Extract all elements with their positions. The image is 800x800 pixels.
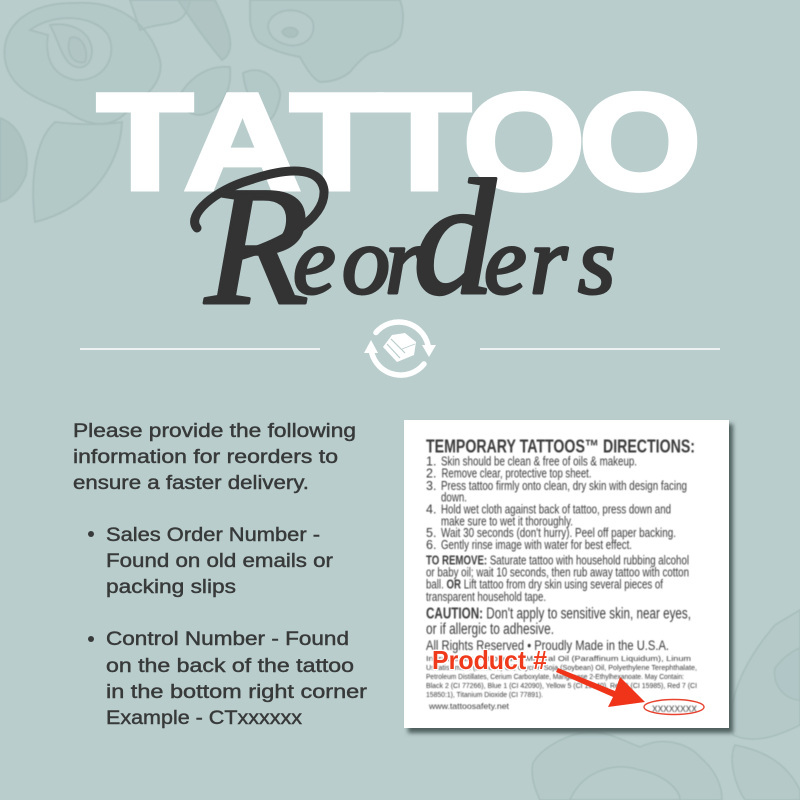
intro text and bullet list: Sales Order Number - xyxy=(106,525,320,546)
intro text and bullet list: in the bottom right corner xyxy=(106,682,368,703)
panel: tattoo directions card: 4. xyxy=(426,503,436,517)
panel: tattoo directions card: TO REMOVE: Saturate tattoo with household rubbing alcohol xyxy=(426,554,689,568)
panel: tattoo directions card: 6. xyxy=(426,538,436,552)
decorative roses bottom right xyxy=(532,610,800,800)
panel: tattoo directions card: Black 2 (CI 77266), Blue 1 (CI 42090), Yellow 5 (CI 19140), Red 6 (CI 15985), Red 7 (CI xyxy=(426,681,697,690)
title: TATTOO xyxy=(97,66,701,219)
script heading: Reorders: e xyxy=(293,207,336,314)
title: TATTOO: T xyxy=(290,66,383,219)
card shadow xyxy=(408,424,733,733)
panel: tattoo directions card: Remove clear, protective top sheet. xyxy=(442,466,592,480)
script heading: Reorders: R xyxy=(204,152,309,340)
panel: tattoo directions card xyxy=(404,420,729,728)
left divider xyxy=(80,348,320,350)
panel: tattoo directions card: XXXXXXXX xyxy=(652,704,697,714)
panel: tattoo directions card: 5. xyxy=(426,526,436,540)
script heading: Reorders: e xyxy=(484,207,527,314)
panel: tattoo directions card: Press tattoo firmly onto clean, dry skin with design facing xyxy=(441,479,687,493)
title: TATTOO: O xyxy=(463,66,585,219)
intro text and bullet list: information for reorders to xyxy=(73,447,338,468)
panel: tattoo directions card: Gently rinse image with water for best effect. xyxy=(441,538,632,552)
title: TATTOO: T xyxy=(378,66,471,219)
panel: tattoo directions card: make sure to wet it thoroughly. xyxy=(441,514,573,528)
panel: tattoo directions card: TEMPORARY TATTOOS™ DIRECTIONS: xyxy=(426,436,695,457)
panel: tattoo directions card: 15850:1), Titanium Dioxide (CI 77891). xyxy=(426,690,543,699)
intro text and bullet list xyxy=(73,421,368,729)
intro text and bullet list: Control Number - Found xyxy=(106,629,349,650)
panel: tattoo directions card: Skin should be clean & free of oils & makeup. xyxy=(441,455,637,469)
intro text and bullet list: on the back of the tattoo xyxy=(106,656,354,677)
panel: tattoo directions card: Ingredients: Petrolatum, Mineral Oil (Paraffinum Liquidum), Linum xyxy=(426,654,691,663)
panel: tattoo directions card: transparent household tape. xyxy=(426,590,546,604)
panel: tattoo directions card: Wait 30 seconds (don't hurry). Peel off paper backing. xyxy=(441,526,676,540)
script heading: Reorders xyxy=(195,146,615,340)
panel: tattoo directions card: or baby oil; wait 10 seconds, then rub away tattoo with cotton xyxy=(426,566,689,580)
panel: tattoo directions card: ball. OR Lift tattoo from dry skin using several pieces of xyxy=(426,578,663,592)
panel: tattoo directions card: 3. xyxy=(426,479,436,493)
intro text and bullet list: packing slips xyxy=(106,577,236,598)
title: TATTOO: T xyxy=(97,66,193,219)
right divider xyxy=(480,348,720,350)
panel: tattoo directions card: Usitatissimum (Linseed) Oil, Glycine Soja (Soybean) Oil, Polyethylene Terephthalate, xyxy=(426,663,697,672)
title: TATTOO: O xyxy=(579,66,701,219)
intro text and bullet list: Example - CTxxxxxx xyxy=(106,708,303,729)
script heading: Reorders: o xyxy=(342,207,390,314)
decorative roses top left xyxy=(0,0,403,222)
intro text and bullet list: ensure a faster delivery. xyxy=(73,473,309,494)
panel: tattoo directions card: down. xyxy=(441,491,467,505)
arrow: pointing to product number xyxy=(556,668,645,707)
panel: tattoo directions card: 1. xyxy=(426,455,436,469)
circled product number xyxy=(644,700,704,714)
icon: reorder box with circular arrows xyxy=(364,322,436,375)
callout: Product #: Product # xyxy=(432,645,548,675)
panel: tattoo directions card: Petroleum Distillates, Cerium Carboxylate, Manganese 2-Ethylhexanoate. May Contain: xyxy=(426,672,684,681)
panel: tattoo directions card: 2. xyxy=(426,466,436,480)
panel: tattoo directions card: CAUTION: Don't apply to sensitive skin, near eyes, xyxy=(426,606,691,622)
title: TATTOO: A xyxy=(184,66,301,219)
script heading: Reorders: d xyxy=(413,146,496,329)
script heading: Reorders: r xyxy=(385,207,423,314)
panel: tattoo directions card: or if allergic to adhesive. xyxy=(426,621,554,638)
intro text and bullet list: Found on old emails or xyxy=(106,551,334,572)
panel: tattoo directions card: Hold wet cloth against back of tattoo, press down and xyxy=(441,503,671,517)
script heading: Reorders: s xyxy=(578,207,615,314)
script heading: Reorders: r xyxy=(530,207,568,314)
panel: tattoo directions card: www.tattoosafety.net xyxy=(428,701,510,711)
intro text and bullet list: Please provide the following xyxy=(73,421,356,442)
panel: tattoo directions card: All Rights Reserved • Proudly Made in the U.S.A. xyxy=(426,638,669,653)
